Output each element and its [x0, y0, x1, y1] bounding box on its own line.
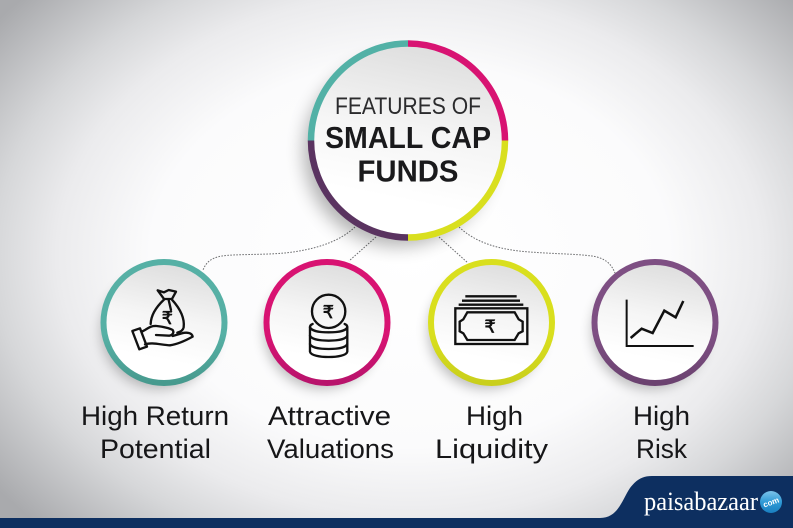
- label: high liquidity: [435, 401, 549, 464]
- central title: FEATURES OF: [335, 93, 481, 120]
- label: high return potential: Potential: [100, 434, 211, 464]
- icon: coin stack: ₹: [323, 302, 334, 322]
- footer brand band: [0, 476, 793, 528]
- label: high liquidity: High: [466, 401, 523, 431]
- ring segments: [311, 44, 505, 238]
- dotted connectors: [203, 227, 615, 273]
- label: attractive valuations: Valuations: [267, 434, 394, 464]
- label: high risk: Risk: [636, 434, 687, 464]
- icon: banknote stack: ₹: [484, 317, 496, 337]
- feature: high return potential: [101, 262, 224, 389]
- label: high risk: High: [633, 401, 690, 431]
- central title: FUNDS: [358, 154, 458, 188]
- label: high return potential: High Return: [81, 401, 229, 431]
- logo wordmark: paisabazaar: [644, 487, 758, 516]
- central circle: [304, 42, 506, 246]
- icon: line chart: [627, 300, 694, 346]
- logo com badge: com: [762, 495, 780, 510]
- logo com badge: [760, 491, 782, 513]
- feature: attractive valuations: [264, 262, 388, 389]
- label: high risk: [633, 401, 690, 464]
- feature: high liquidity: [428, 262, 552, 389]
- label: high return potential: [81, 401, 229, 464]
- label: high liquidity: Liquidity: [435, 434, 549, 464]
- label: attractive valuations: [267, 401, 394, 464]
- feature: high risk: [592, 262, 716, 389]
- label: attractive valuations: Attractive: [268, 401, 391, 431]
- central title: SMALL CAP: [325, 121, 491, 155]
- central title: [325, 93, 491, 188]
- icon: money bag on hand: ₹: [162, 308, 173, 328]
